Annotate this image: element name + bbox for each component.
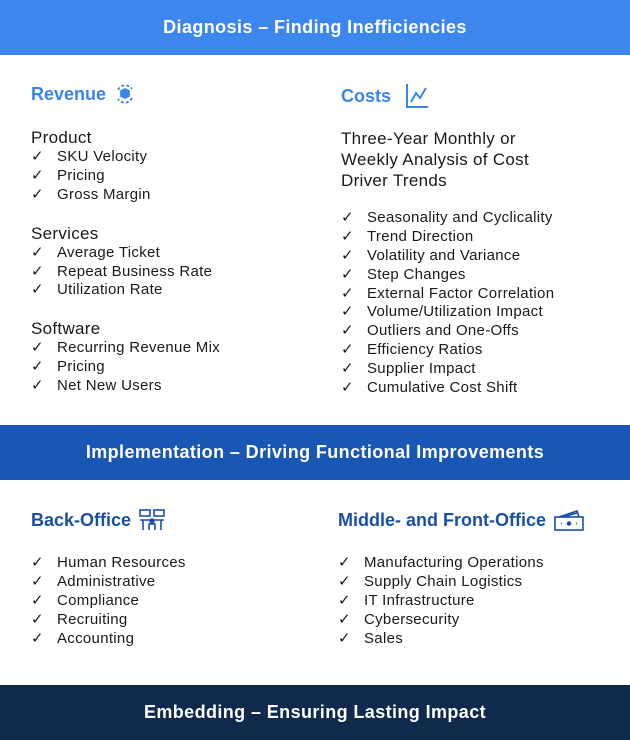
list: middle- and front-office (338, 554, 544, 647)
heading: middle- and front-office: Middle- and Front-Office (338, 510, 546, 530)
list: revenue: ✓ (31, 167, 44, 184)
list: costs: ✓ (341, 209, 354, 226)
list: revenue: Software (31, 319, 100, 338)
list: back-office: Human Resources (57, 554, 186, 571)
list: middle- and front-office: ✓ (338, 554, 351, 571)
list: costs: ✓ (341, 360, 354, 377)
list: middle- and front-office: IT Infrastructure (364, 592, 475, 609)
list: middle- and front-office: ✓ (338, 592, 351, 609)
header band: diagnosis: Diagnosis – Finding Inefficiencies (163, 17, 467, 37)
list: costs: Volume/Utilization Impact (367, 303, 543, 320)
list: revenue: Product (31, 128, 92, 147)
list: revenue: Gross Margin (57, 186, 151, 203)
list: back-office: ✓ (31, 630, 44, 647)
list: costs: Outliers and One-Offs (367, 322, 519, 339)
list: back-office: Administrative (57, 573, 155, 590)
list: middle- and front-office: Supply Chain Logistics (364, 573, 522, 590)
list: costs: ✓ (341, 247, 354, 264)
list: costs: Volatility and Variance (367, 247, 520, 264)
list: revenue: ✓ (31, 186, 44, 203)
list: costs (341, 129, 554, 396)
list: revenue: SKU Velocity (57, 148, 147, 165)
list: back-office: ✓ (31, 554, 44, 571)
list: revenue: Utilization Rate (57, 281, 163, 298)
list: middle- and front-office: ✓ (338, 611, 351, 628)
list: revenue: Services (31, 224, 99, 243)
list: costs: Driver Trends (341, 171, 447, 190)
list: back-office: Compliance (57, 592, 139, 609)
list: revenue: Pricing (57, 167, 105, 184)
heading: costs: Costs (341, 86, 391, 106)
list: middle- and front-office: ✓ (338, 630, 351, 647)
list: revenue: Recurring Revenue Mix (57, 339, 220, 356)
list: back-office: ✓ (31, 611, 44, 628)
list: costs: ✓ (341, 379, 354, 396)
list: revenue: ✓ (31, 244, 44, 261)
list: middle- and front-office: Cybersecurity (364, 611, 460, 628)
list: costs: Weekly Analysis of Cost (341, 150, 529, 169)
list: back-office: Recruiting (57, 611, 128, 628)
list: costs: Efficiency Ratios (367, 341, 483, 358)
list: revenue: ✓ (31, 339, 44, 356)
list: middle- and front-office: ✓ (338, 573, 351, 590)
list: back-office: Accounting (57, 630, 134, 647)
list: costs: Seasonality and Cyclicality (367, 209, 553, 226)
list: costs: Cumulative Cost Shift (367, 379, 518, 396)
list: middle- and front-office: Sales (364, 630, 403, 647)
list: costs: Step Changes (367, 266, 466, 283)
list: costs: External Factor Correlation (367, 285, 554, 302)
list: revenue: ✓ (31, 281, 44, 298)
list: revenue: ✓ (31, 263, 44, 280)
list: revenue (31, 128, 220, 394)
list: costs: Supplier Impact (367, 360, 476, 377)
icon: cash register (554, 510, 584, 531)
list: costs: ✓ (341, 266, 354, 283)
list: costs: ✓ (341, 341, 354, 358)
icon: people at screens (139, 509, 165, 530)
header band: implementation (0, 425, 630, 480)
header band: implementation: Implementation – Driving Functional Improvements (86, 442, 544, 462)
list: revenue: Repeat Business Rate (57, 263, 212, 280)
list: revenue: ✓ (31, 358, 44, 375)
list: back-office (31, 554, 186, 647)
icon: revenue cycle (117, 84, 133, 104)
list: middle- and front-office: Manufacturing Operations (364, 554, 544, 571)
list: costs: ✓ (341, 285, 354, 302)
list: costs: ✓ (341, 228, 354, 245)
list: costs: ✓ (341, 303, 354, 320)
header band: diagnosis (0, 0, 630, 55)
list: revenue: ✓ (31, 377, 44, 394)
heading: costs (341, 84, 428, 108)
list: back-office: ✓ (31, 573, 44, 590)
list: costs: Trend Direction (367, 228, 473, 245)
list: revenue: Net New Users (57, 377, 162, 394)
list: revenue: Average Ticket (57, 244, 160, 261)
icon: line chart (406, 84, 428, 108)
heading: back-office: Back-Office (31, 510, 131, 530)
heading: revenue: Revenue (31, 84, 106, 104)
list: revenue: ✓ (31, 148, 44, 165)
list: back-office: ✓ (31, 592, 44, 609)
header band: embedding: Embedding – Ensuring Lasting Impact (144, 702, 486, 722)
header band: embedding (0, 685, 630, 740)
list: costs: ✓ (341, 322, 354, 339)
list: costs: Three-Year Monthly or (341, 129, 516, 148)
list: revenue: Pricing (57, 358, 105, 375)
